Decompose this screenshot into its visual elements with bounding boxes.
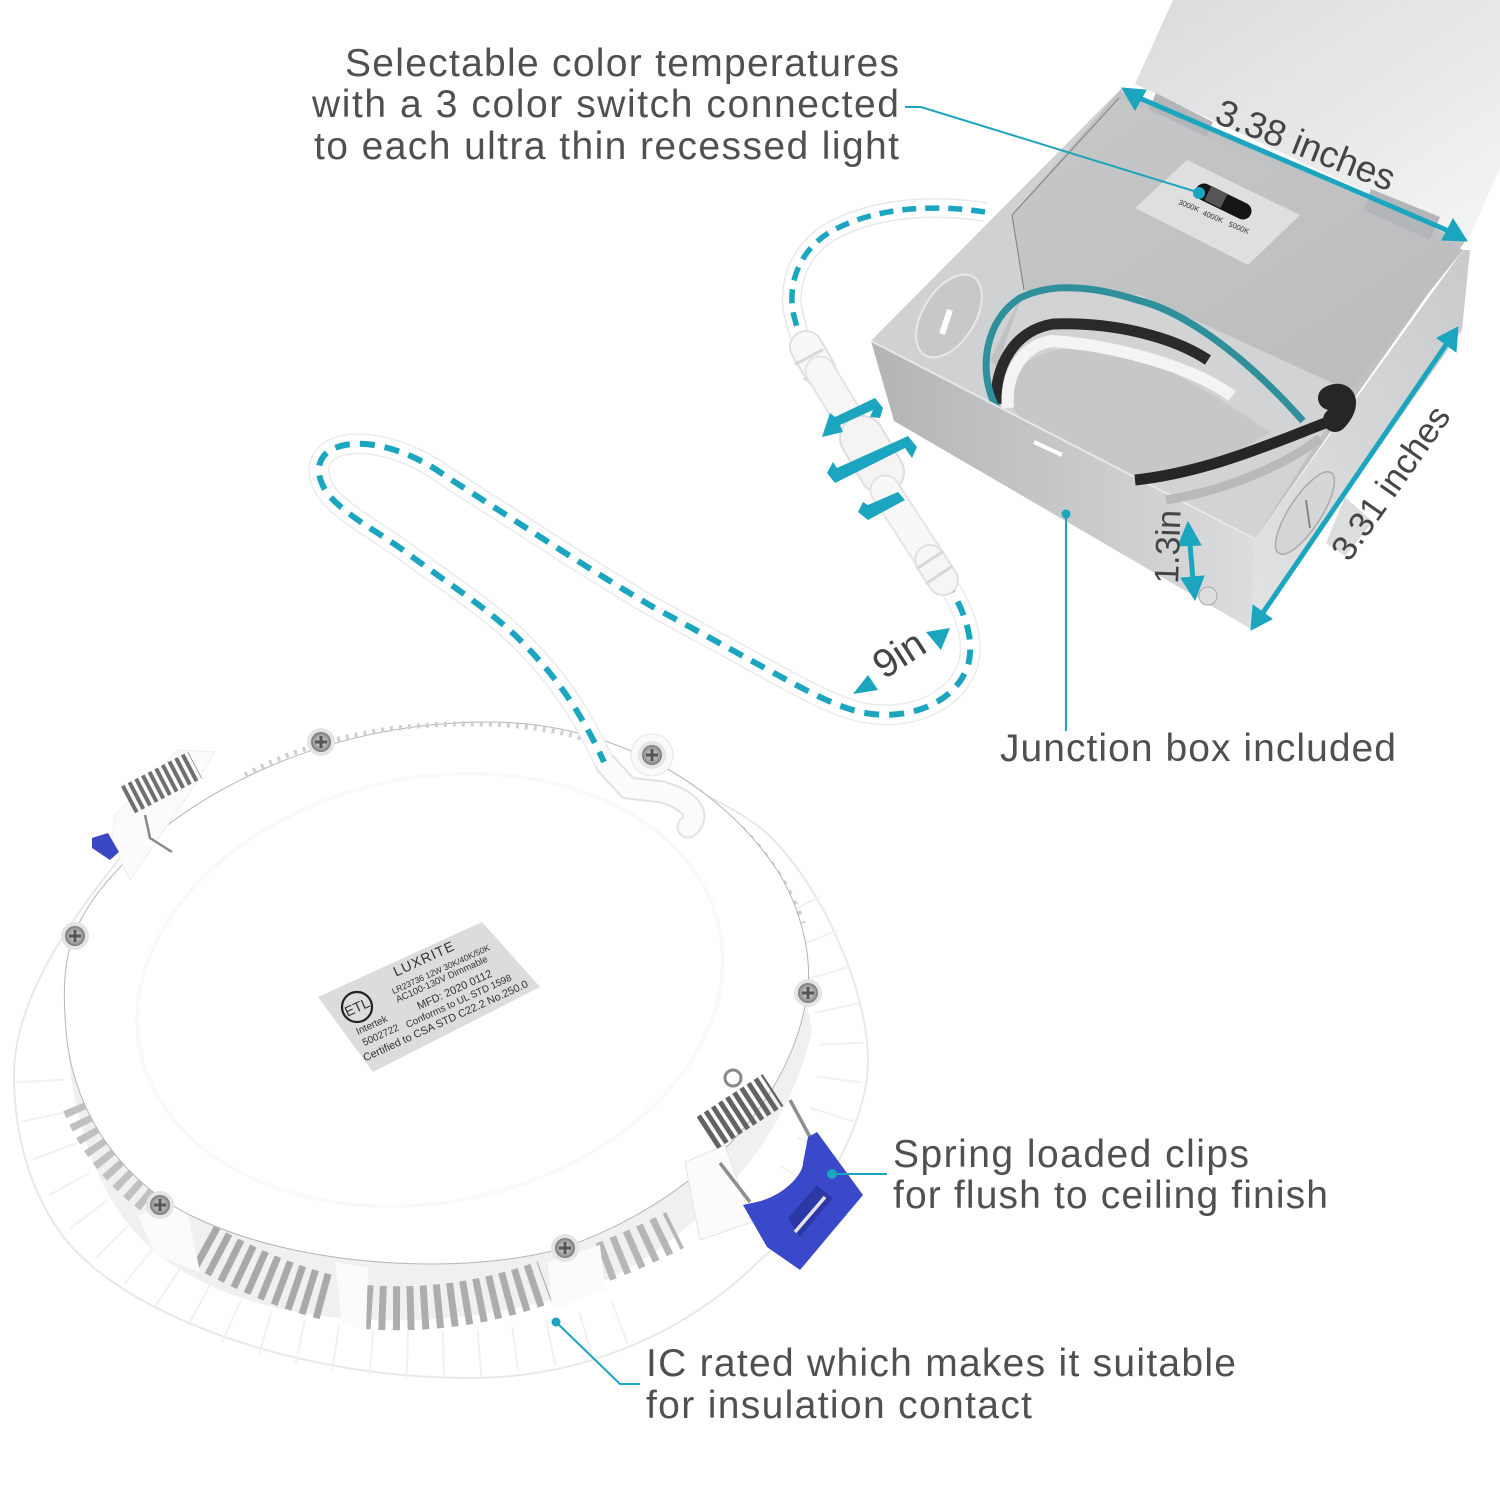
product label [318, 922, 540, 1072]
callout text [311, 42, 899, 168]
interior floor [985, 290, 1350, 539]
junction box [871, 0, 1500, 629]
product label: MFD: 2020 0112 [415, 968, 494, 1013]
left knockout [903, 263, 995, 369]
long cable with length dashes [319, 444, 970, 762]
slide switch [1204, 192, 1243, 211]
dimension arrow: depth [1251, 327, 1458, 630]
spring text: Spring loaded clips [893, 1133, 1249, 1176]
callout leader [905, 107, 1205, 199]
right wall bracket [1326, 497, 1373, 556]
flange radial ridges [40, 880, 842, 1355]
box front face [871, 341, 1255, 629]
callout text: to each ultra thin recessed light [314, 125, 899, 168]
callout: spring clips [827, 1133, 1328, 1217]
switch plate: 4000K [1201, 208, 1225, 225]
product label: Intertek [355, 1013, 390, 1038]
spring text [893, 1133, 1328, 1217]
left spring clip [92, 750, 215, 880]
dimension arrow: width [1122, 88, 1467, 241]
dimension text: cable length: 9in [865, 622, 934, 688]
heat sink wall [66, 1000, 812, 1320]
box interior [871, 88, 1466, 539]
certification mark: ETL [342, 994, 372, 1020]
junction leader [1062, 510, 1070, 731]
callout text: Selectable color temperatures [345, 42, 899, 85]
screws [61, 728, 822, 1262]
IC leader [552, 1318, 640, 1384]
dimension text: width: 3.38 inches [1210, 91, 1401, 199]
callout: IC rated [552, 1318, 1236, 1427]
callout: color temperatures [311, 42, 1205, 199]
box lid [1135, 0, 1500, 240]
wire clamp [606, 734, 694, 827]
left inner wall [871, 88, 1122, 470]
connector [796, 347, 951, 583]
dimension text: depth: 3.31 inches [1324, 399, 1458, 568]
product label: LR23736 12W 30K/40K/50K [390, 942, 492, 996]
switch plate: 3000K [1177, 197, 1201, 214]
front screw [1199, 587, 1217, 605]
switch compartment [1012, 98, 1463, 391]
dimension text: height: 1.3in [1148, 509, 1189, 584]
dimension arrow: height [1178, 522, 1204, 600]
floor highlight [1009, 348, 1270, 476]
product label: Certified to CSA STD C22.2 No.250.0 [361, 978, 530, 1064]
switch plate [1135, 160, 1300, 265]
box right face [1251, 250, 1470, 629]
product label: 5002722 [361, 1022, 401, 1049]
spring text: for flush to ceiling finish [893, 1174, 1328, 1217]
lower wires [1135, 396, 1344, 500]
raised centre ring [96, 721, 764, 1259]
junction text: Junction box included [1000, 727, 1396, 770]
panel flange [14, 751, 868, 1378]
twist arrow bands [822, 398, 917, 520]
blue clip tab [743, 1132, 863, 1270]
spring leader [827, 1169, 887, 1179]
callout: junction box [1000, 510, 1396, 770]
heat sink blocks [138, 1200, 605, 1332]
switch plate: 5000K [1227, 219, 1251, 236]
top edge teeth [245, 724, 610, 775]
IC text [646, 1342, 1236, 1427]
hinge tabs [1149, 93, 1213, 137]
dimension arrow: cable length [853, 628, 950, 694]
panel back plate [64, 722, 809, 1264]
heat sink fins [78, 832, 798, 1308]
product label: AC100-130V Dimmable [394, 954, 490, 1005]
IC text: IC rated which makes it suitable [646, 1342, 1236, 1385]
right spring clip [685, 1070, 863, 1270]
callout text: with a 3 color switch connected [311, 83, 899, 126]
product label: LUXRITE [391, 937, 457, 979]
short cable with length dashes [792, 208, 985, 345]
right knockout [1265, 464, 1345, 562]
IC text: for insulation contact [646, 1384, 1032, 1427]
product label: Conforms to UL STD 1598 [404, 973, 514, 1031]
recessed light panel [14, 721, 868, 1378]
inner wires [986, 288, 1303, 480]
